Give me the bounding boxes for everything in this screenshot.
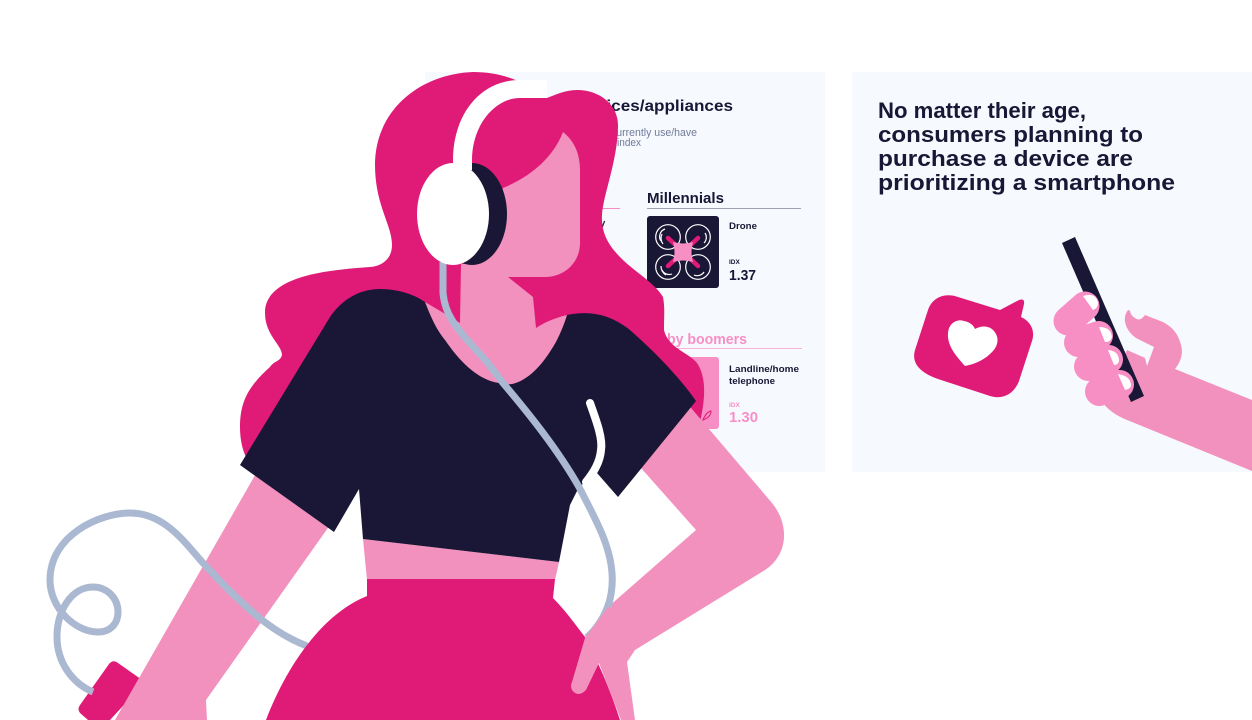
hair [240, 72, 704, 470]
midriff [363, 539, 559, 580]
panel description [611, 127, 697, 149]
shirt strap [586, 403, 601, 482]
headphone cable: front [443, 262, 612, 607]
left column rule and text fragment [590, 208, 620, 229]
headphone cable: lower right [586, 573, 612, 637]
icon: landline telephone tile [650, 357, 719, 429]
heading: smartphone priority: purchase a device are [878, 146, 1133, 171]
face and neck [425, 132, 580, 400]
icon: heart speech bubble [914, 295, 1033, 397]
heading: smartphone priority [878, 98, 1175, 195]
panel description: index [617, 137, 641, 149]
panel description: currently use/have [611, 127, 697, 139]
millennials heading: Millennials [647, 190, 724, 207]
boomers heading: by boomers [667, 331, 747, 348]
right arm [571, 395, 784, 720]
illustration: hand holding smartphone [1062, 237, 1252, 471]
skirt [266, 579, 620, 720]
crop top [240, 289, 696, 562]
heading: smartphone priority: No matter their age, [878, 98, 1086, 123]
drone label: 1.37 [729, 267, 756, 284]
landline label: Landline/home [729, 364, 799, 375]
drone label: IDX [729, 259, 740, 266]
landline label [729, 364, 799, 426]
heading: smartphone priority: prioritizing a smartphone [878, 170, 1175, 195]
drone label [729, 221, 757, 284]
panel: devices and appliances [425, 72, 825, 472]
landline label: telephone [729, 376, 775, 387]
headphones [417, 80, 547, 265]
headphone cable: left loop [50, 513, 307, 692]
landline label: IDX [729, 402, 740, 409]
panel heading: Devices/appliances [575, 98, 733, 115]
illustration: woman with headphones [50, 72, 784, 720]
icon: drone [647, 216, 719, 288]
landline label: 1.30 [729, 409, 758, 426]
left arm [115, 470, 330, 720]
panel: smartphone [852, 72, 1252, 472]
heading: smartphone priority: consumers planning to [878, 122, 1143, 147]
left column rule and text fragment: y [600, 218, 606, 229]
drone label: Drone [729, 221, 757, 232]
music player [78, 661, 145, 720]
